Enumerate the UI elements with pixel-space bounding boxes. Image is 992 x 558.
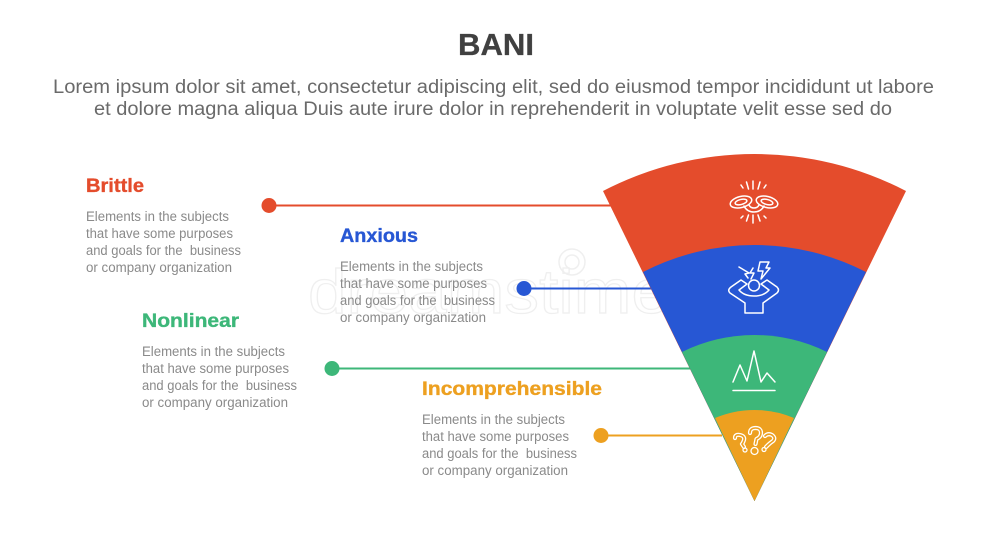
- text block: Anxious: that have some purposes: [340, 276, 487, 291]
- subtitle: [53, 77, 934, 120]
- connector: Nonlinear: [324, 361, 692, 376]
- text block: Nonlinear: [142, 311, 297, 410]
- subtitle: Lorem ipsum dolor sit amet, consectetur adipiscing elit, sed do eiusmod tempor incididunt ut labore: [53, 77, 934, 98]
- text block: Incomprehensible: that have some purposes: [422, 429, 569, 444]
- text block: Anxious: and goals for the business: [340, 293, 495, 308]
- text block: Nonlinear: that have some purposes: [142, 361, 289, 376]
- icon: broken chain: [729, 181, 779, 223]
- connector: Brittle: [262, 198, 612, 213]
- text block: Nonlinear: or company organization: [142, 395, 288, 410]
- segment: Incomprehensible: [715, 410, 794, 501]
- text block: Nonlinear: Elements in the subjects: [142, 344, 285, 359]
- text block: Nonlinear: Nonlinear: [142, 311, 240, 332]
- text block: Nonlinear: and goals for the business: [142, 378, 297, 393]
- text block: Incomprehensible: or company organization: [422, 463, 568, 478]
- segment: Brittle: [603, 154, 906, 501]
- text block: Incomprehensible: Elements in the subjects: [422, 412, 565, 427]
- text block: Anxious: Elements in the subjects: [340, 259, 483, 274]
- text block: Brittle: and goals for the business: [86, 243, 241, 258]
- connector: Anxious: [516, 281, 655, 296]
- title: BANI: [458, 28, 534, 62]
- icon: stressed head: [729, 262, 778, 313]
- text block: Incomprehensible: and goals for the business: [422, 446, 577, 461]
- text block: Brittle: Brittle: [86, 176, 144, 197]
- icon: question marks: [735, 428, 774, 454]
- text block: Anxious: [340, 226, 495, 325]
- text block: Brittle: that have some purposes: [86, 226, 233, 241]
- funnel chart: [603, 154, 906, 501]
- text block: Brittle: [86, 176, 241, 275]
- text block: Anxious: Anxious: [340, 226, 418, 247]
- connector: Incomprehensible: [594, 428, 722, 443]
- segment: Nonlinear: [682, 335, 827, 501]
- text block: Anxious: or company organization: [340, 310, 486, 325]
- watermark: dreamstime: [308, 258, 670, 327]
- text block: Incomprehensible: [422, 379, 602, 478]
- icon: volatile line chart: [733, 351, 775, 390]
- text block: Brittle: or company organization: [86, 260, 232, 275]
- subtitle: et dolore magna aliqua Duis aute irure dolor in reprehenderit in voluptate velit esse sed do: [94, 99, 892, 120]
- text block: Incomprehensible: Incomprehensible: [422, 379, 602, 400]
- text block: Brittle: Elements in the subjects: [86, 209, 229, 224]
- segment: Anxious: [643, 245, 866, 501]
